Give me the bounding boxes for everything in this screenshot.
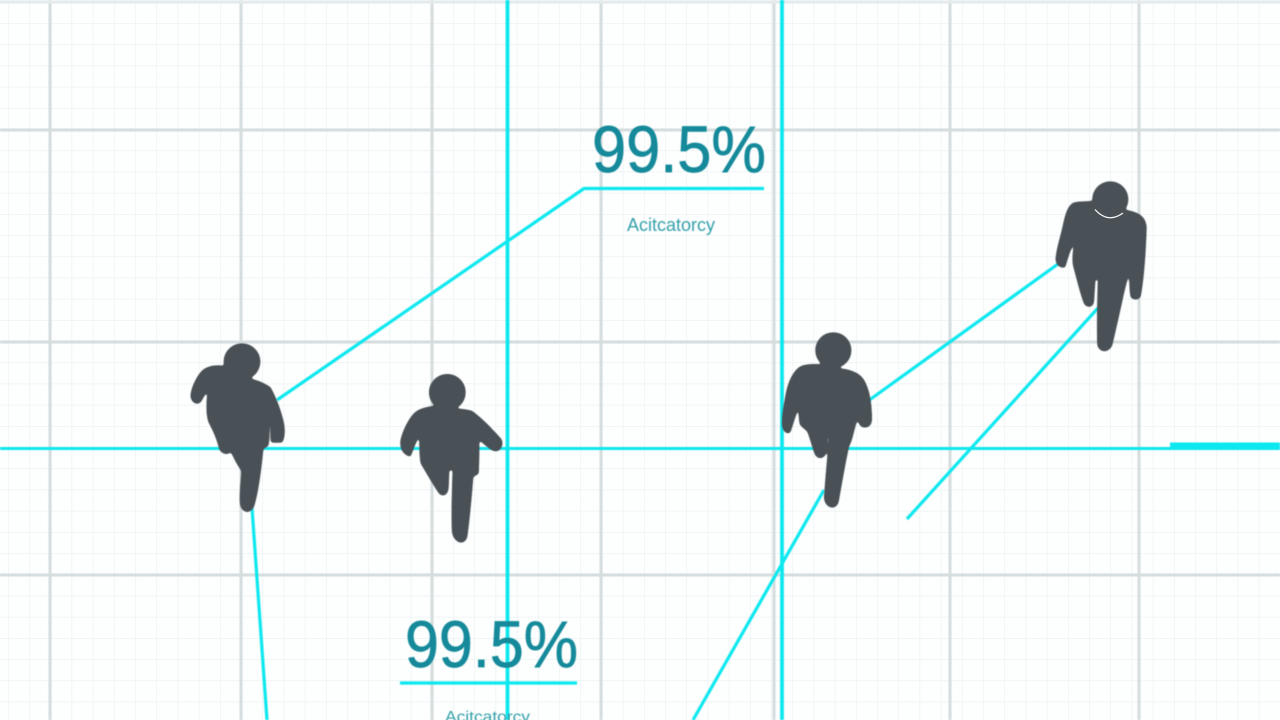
bottom stat: 99.5% accuracy xyxy=(405,607,578,720)
icon: person three xyxy=(782,332,872,508)
icon: person two xyxy=(400,374,502,543)
icon: person one xyxy=(191,343,285,512)
top stat: 99.5% accuracy: Acitcatorcy xyxy=(627,215,715,235)
top stat: 99.5% accuracy xyxy=(592,112,766,235)
bottom stat: 99.5% accuracy: 99.5% xyxy=(405,607,578,681)
top stat: 99.5% accuracy: 99.5% xyxy=(592,112,766,186)
icon: person four xyxy=(1056,181,1147,351)
